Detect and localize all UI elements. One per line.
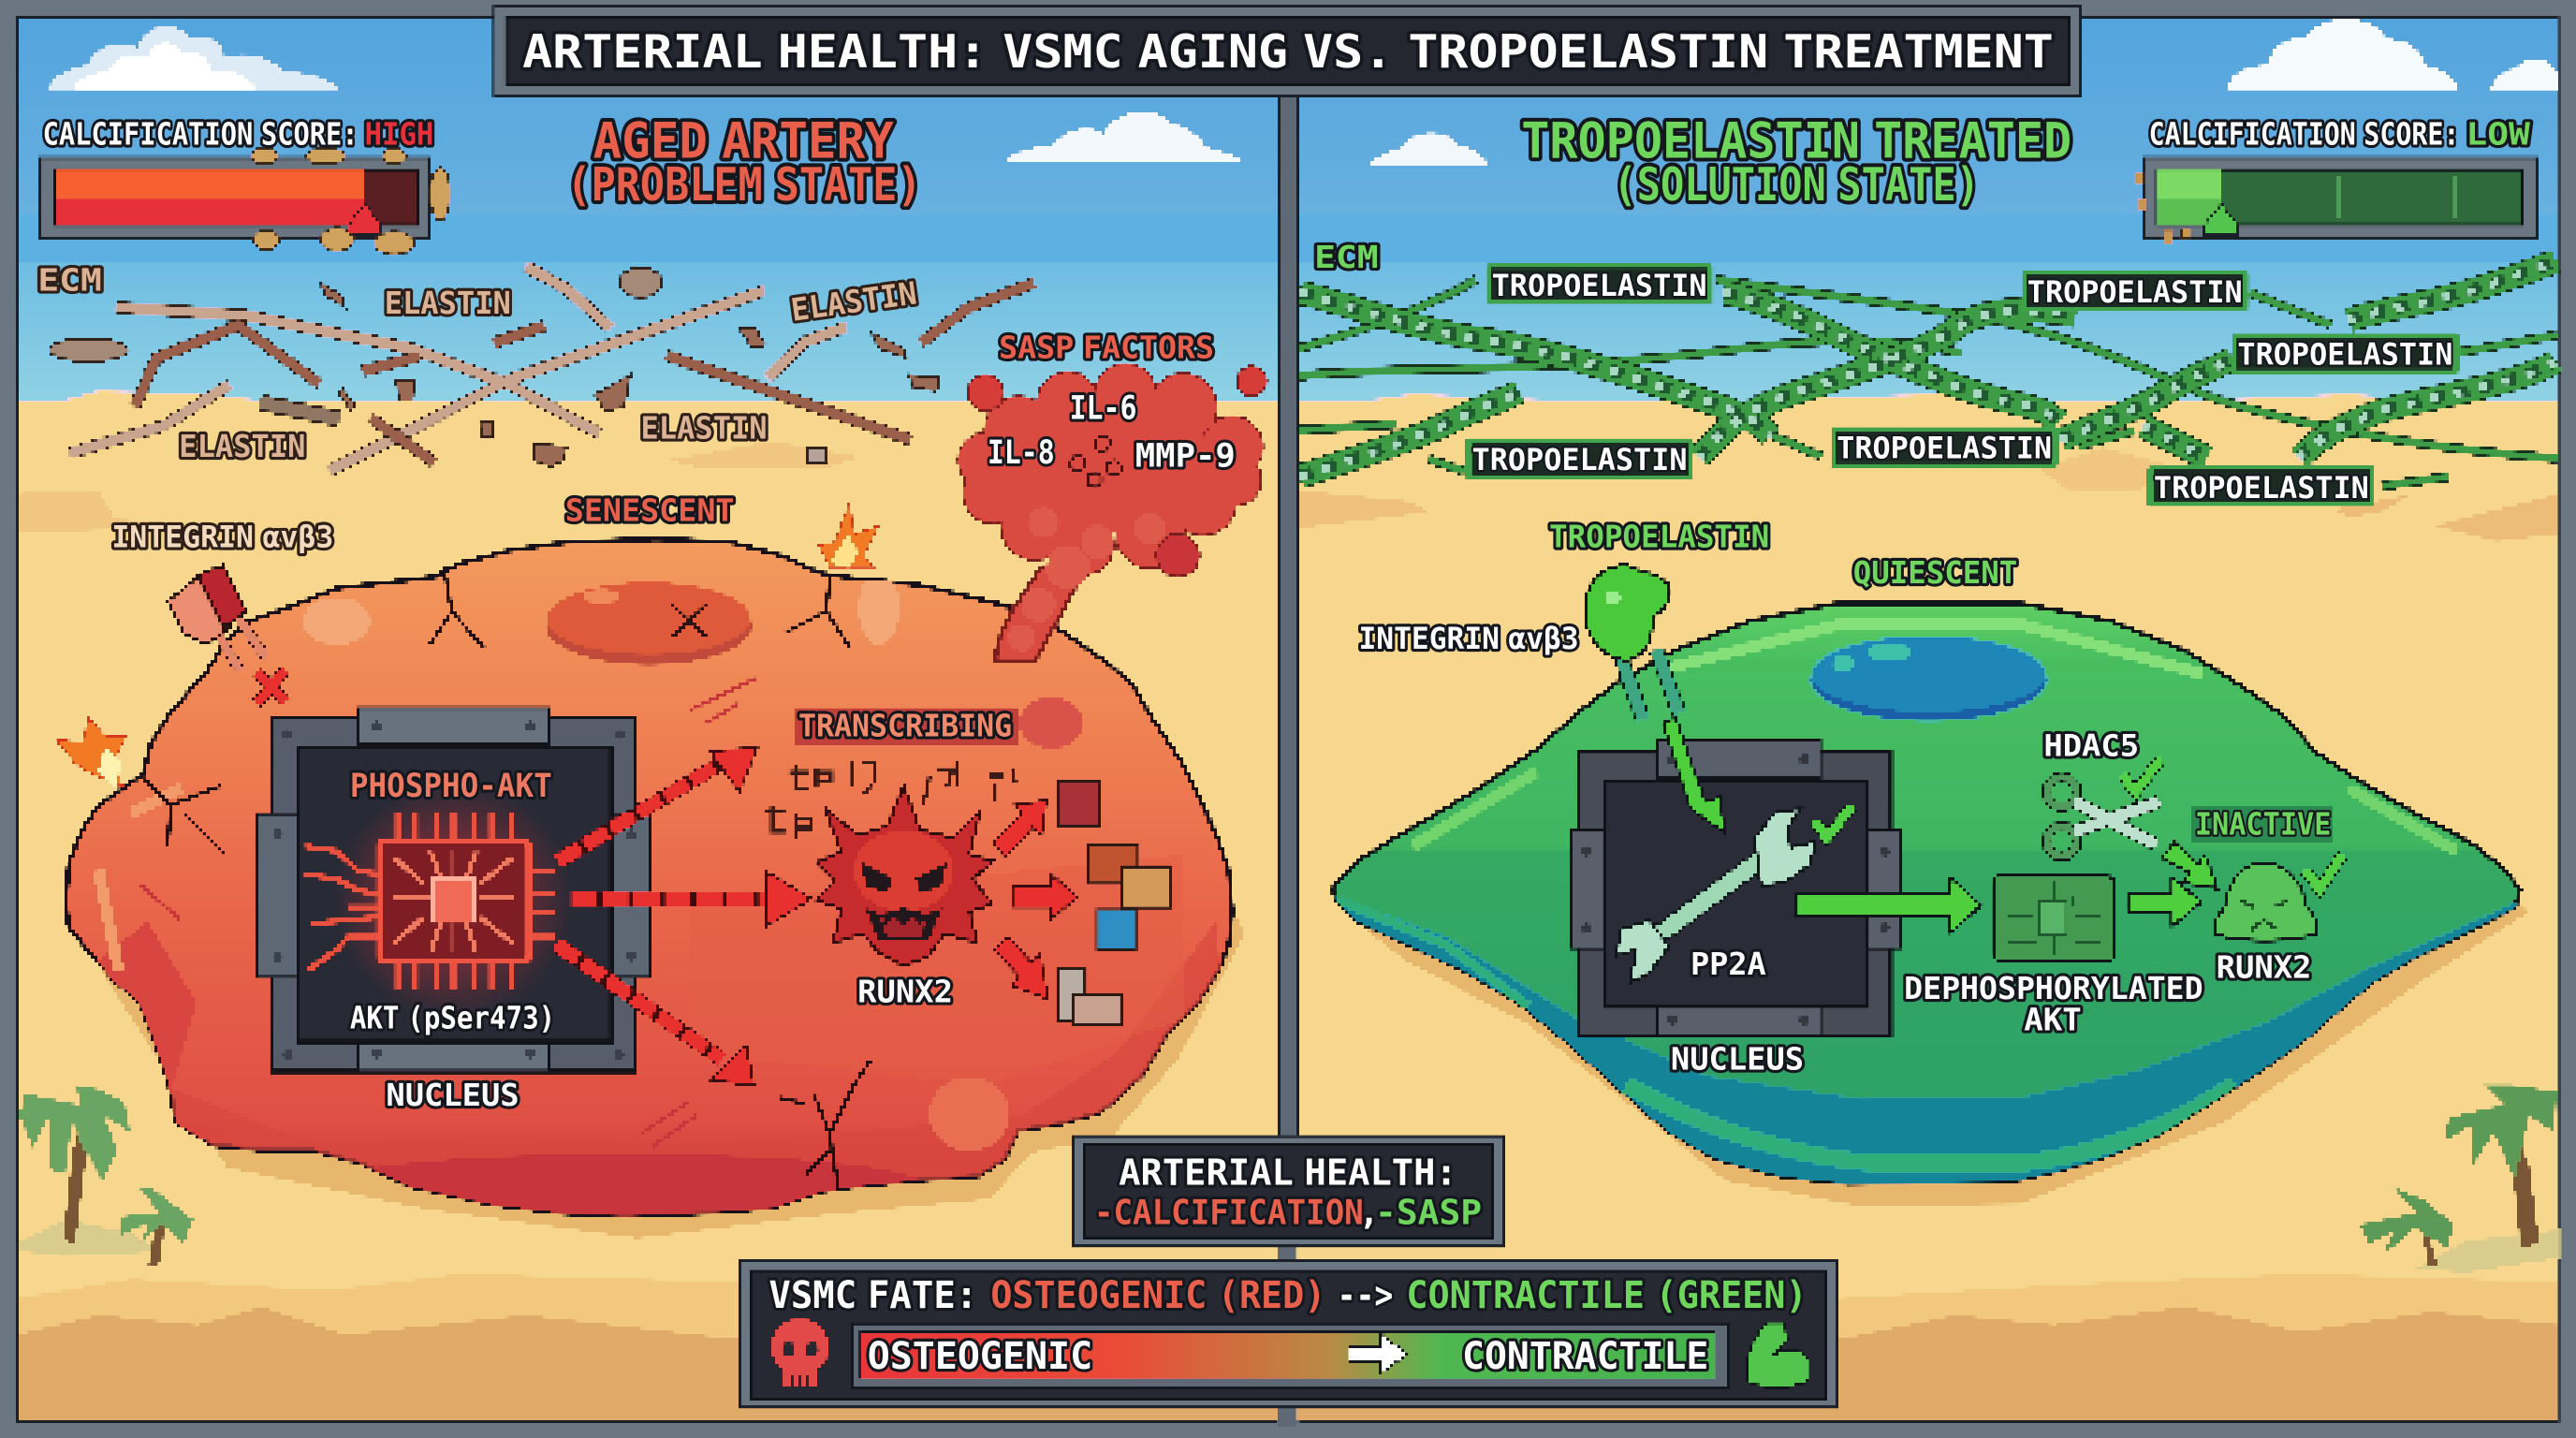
nucleus right xyxy=(1571,741,1901,1035)
outcome comma: , xyxy=(1358,1193,1380,1233)
fate gradient bar xyxy=(851,1323,1728,1387)
nucleus left xyxy=(258,708,651,1071)
MMP-9: MMP-9 xyxy=(1135,436,1236,475)
tropoelastin binder label: TROPOELASTIN xyxy=(1549,518,1769,554)
HDAC5 label: HDAC5 xyxy=(2043,729,2139,763)
SASP cloud xyxy=(959,365,1266,661)
icon: inactive RUNX2 xyxy=(2214,862,2318,941)
transcribing label: TRANSCRIBING xyxy=(798,707,1012,743)
PP2A label: PP2A xyxy=(1690,946,1766,982)
green pathway arrows xyxy=(1662,718,2217,933)
icon: broken integrin with x xyxy=(168,565,285,703)
AKT pSer473 label: AKT (pSer473) xyxy=(350,1000,555,1036)
transcription scribbles xyxy=(766,759,1016,838)
elastin label 4: ELASTIN xyxy=(640,410,768,447)
icon: sparks on membrane xyxy=(56,503,879,785)
cracks xyxy=(139,567,871,1186)
integrin label left: INTEGRIN αvβ3 xyxy=(111,521,333,554)
tropoelastin tag 3: TROPOELASTIN xyxy=(2237,339,2452,373)
outcome minus calcification: -CALCIFICATION xyxy=(1094,1193,1364,1233)
tropoelastin tag 6: TROPOELASTIN xyxy=(2154,472,2369,506)
inactive label: INACTIVE xyxy=(2195,806,2331,843)
icon: calcification cubes xyxy=(1058,781,1171,1025)
icon: phospho-AKT chip xyxy=(305,782,572,1019)
icon: angry RUNX2 xyxy=(816,785,994,966)
nucleolus quiescent xyxy=(1810,636,2047,721)
panel: treated cell xyxy=(1332,603,2530,1206)
SASP heading: SASP FACTORS xyxy=(999,330,1214,366)
tropoelastin tag frames xyxy=(1466,263,2459,507)
RUNX2 label left: RUNX2 xyxy=(857,974,953,1010)
icon: check mark wrench xyxy=(1815,807,1852,838)
outcome heading: ARTERIAL HEALTH: xyxy=(1119,1152,1457,1194)
fate heading: VSMC FATE: xyxy=(768,1273,977,1317)
VSMC fate panel frame xyxy=(739,1260,1837,1408)
clouds xyxy=(50,20,2556,165)
bar label osteogenic: OSTEOGENIC xyxy=(868,1334,1092,1378)
icon: skull xyxy=(772,1319,828,1386)
tropoelastin tag 2: TROPOELASTIN xyxy=(2027,276,2243,310)
transcribing tag xyxy=(794,707,1018,746)
helical tropoelastin ECM xyxy=(1298,261,2556,487)
dashed activation arrows xyxy=(557,748,812,1086)
icon: flexed arm xyxy=(1746,1323,1808,1387)
gauge value high: HIGH xyxy=(365,115,433,152)
palm trees right xyxy=(2359,1084,2559,1273)
AKT label: AKT xyxy=(2024,1001,2082,1037)
palm trees left xyxy=(20,1084,194,1265)
elastin label 2: ELASTIN xyxy=(789,274,919,329)
icon: tropoelastin bound integrin xyxy=(1586,565,1679,720)
calcification gauge high xyxy=(41,148,450,255)
IL-6: IL-6 xyxy=(1070,389,1137,428)
elastin label 1: ELASTIN xyxy=(385,285,511,321)
dephosphorylated label: DEPHOSPHORYLATED xyxy=(1904,970,2203,1006)
icon: check mark runx2 xyxy=(2305,855,2343,889)
panel: aged artery cell xyxy=(66,539,1249,1239)
fate osteogenic red: OSTEOGENIC (RED) xyxy=(990,1273,1325,1317)
bar label contractile: CONTRACTILE xyxy=(1462,1334,1708,1378)
outcome minus SASP: -SASP xyxy=(1375,1193,1482,1233)
phospho-AKT label: PHOSPHO-AKT xyxy=(350,767,552,805)
divider xyxy=(1278,95,1298,1426)
fate contractile green: CONTRACTILE (GREEN) xyxy=(1406,1273,1808,1317)
fate arrow text: --> xyxy=(1338,1273,1393,1317)
IL-8: IL-8 xyxy=(988,433,1055,472)
gauge label low: CALCIFICATION SCORE: xyxy=(2149,115,2459,152)
title banner frame xyxy=(494,7,2082,97)
icon: dephosphorylated chip xyxy=(1993,875,2115,961)
heading: problem state: (PROBLEM STATE) xyxy=(567,157,922,212)
outcome box frame xyxy=(1073,1136,1503,1247)
icon: check mark scissors xyxy=(2123,759,2160,792)
nucleus label left: NUCLEUS xyxy=(386,1077,520,1113)
gauge value low: LOW xyxy=(2466,115,2531,152)
nucleus label right: NUCLEUS xyxy=(1671,1041,1804,1078)
icon: scissors xyxy=(2047,777,2159,856)
senescent label: SENESCENT xyxy=(565,492,735,528)
tropoelastin tag 4: TROPOELASTIN xyxy=(1472,444,1687,477)
heading: tropoelastin treated: TROPOELASTIN TREATED xyxy=(1521,112,2071,169)
tropoelastin tag 5: TROPOELASTIN xyxy=(1837,433,2052,466)
integrin label right: INTEGRIN αvβ3 xyxy=(1358,623,1579,656)
broken elastin fibers xyxy=(50,266,1035,472)
heading: aged artery: AGED ARTERY xyxy=(593,112,894,169)
calcification gauge low xyxy=(2136,157,2537,245)
title: ARTERIAL HEALTH: VSMC AGING VS. TROPOELASTIN TREATMENT xyxy=(522,24,2054,79)
icon: PP2A wrench xyxy=(1617,809,1815,983)
inactive tag xyxy=(2190,805,2334,843)
gauge label high: CALCIFICATION SCORE: xyxy=(43,115,359,152)
tropoelastin tag 1: TROPOELASTIN xyxy=(1492,270,1707,303)
ECM label right: ECM xyxy=(1314,239,1379,275)
ECM label left: ECM xyxy=(37,262,102,299)
quiescent label: QUIESCENT xyxy=(1853,554,2017,591)
elastin label 3: ELASTIN xyxy=(179,428,305,464)
RUNX2 label right: RUNX2 xyxy=(2217,948,2311,985)
nucleolus senescent xyxy=(546,581,753,666)
heading: solution state: (SOLUTION STATE) xyxy=(1614,157,1980,212)
small red arrows xyxy=(992,800,1076,999)
